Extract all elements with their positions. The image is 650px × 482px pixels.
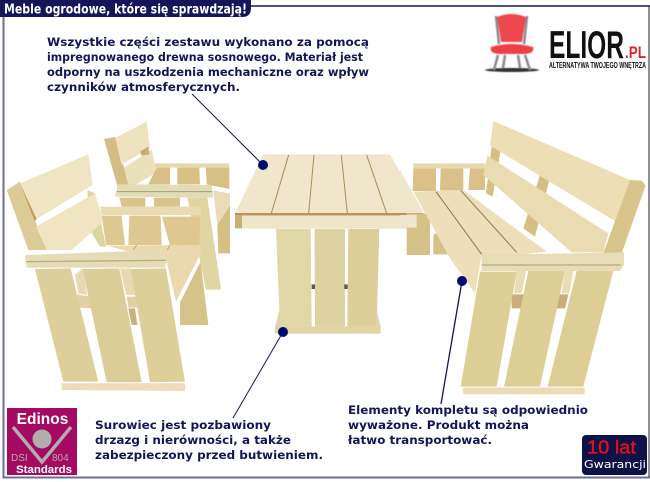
- icon: red chair: [485, 14, 539, 72]
- text block: balance: wyważone. Produkt można: [348, 418, 529, 432]
- badge: 10 year warranty: Gwarancji: [584, 459, 646, 471]
- bench: [400, 121, 646, 394]
- badge: 10 year warranty: 10 lat: [587, 438, 636, 458]
- arrow: balance pointer: [441, 276, 467, 404]
- rear armchair: [104, 122, 230, 290]
- text block: surface: drzazg i nierówności, a także: [95, 433, 291, 447]
- text block: wood material: impregnowanego drewna sosnowego. Materiał jest: [47, 50, 363, 64]
- text block: surface: [95, 418, 323, 462]
- badge: Edinos standards: [7, 408, 77, 476]
- arrow: surface pointer: [233, 327, 288, 418]
- text block: wood material: Wszystkie części zestawu wykonano za pomocą: [47, 35, 369, 49]
- badge: 10 year warranty: [582, 435, 647, 475]
- text block: wood material: [47, 35, 369, 94]
- badge: Edinos standards: Edinos: [17, 411, 68, 428]
- front armchair: [7, 154, 208, 391]
- text block: wood material: czynników atmosferycznych.: [47, 80, 240, 94]
- text block: surface: Surowiec jest pozbawiony: [95, 418, 272, 432]
- badge: Edinos standards: DSI: [11, 453, 28, 464]
- text block: balance: łatwo transportować.: [347, 433, 492, 447]
- title banner: Meble ogrodowe, które się sprawdzają!: [4, 2, 247, 18]
- text block: balance: Elementy kompletu są odpowiednio: [348, 403, 588, 417]
- logo: Elior: [485, 14, 646, 72]
- arrow: wood material pointer: [192, 94, 268, 170]
- text block: balance: [347, 403, 588, 447]
- badge: Edinos standards: 804: [52, 453, 69, 464]
- text block: surface: zabezpieczony przed butwieniem.: [95, 448, 323, 462]
- table: [235, 154, 423, 334]
- badge: Edinos standards: Standards: [16, 464, 72, 476]
- text block: wood material: odporny na uszkodzenia mechaniczne oraz wpływ: [47, 65, 369, 79]
